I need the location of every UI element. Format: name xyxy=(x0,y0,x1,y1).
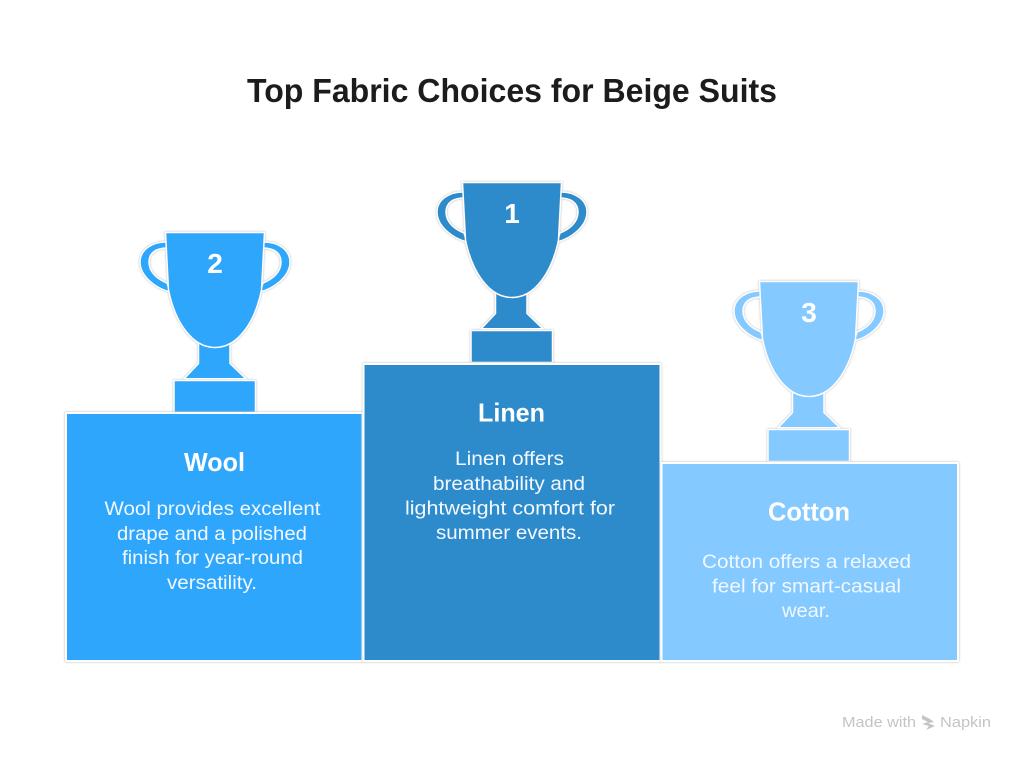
cotton description xyxy=(702,551,911,622)
linen description: breathability and xyxy=(433,473,585,495)
watermark: made with napkin xyxy=(842,715,991,731)
watermark: made with napkin: Made with xyxy=(842,715,916,731)
panel: linen, first place xyxy=(364,182,660,661)
icon: napkin logo xyxy=(922,715,935,730)
cotton rank number: 3 xyxy=(801,297,817,328)
cotton description: Cotton offers a relaxed xyxy=(702,551,911,573)
cotton podium block xyxy=(662,463,958,661)
watermark: made with napkin: Napkin xyxy=(940,715,991,731)
panel: cotton, third place xyxy=(662,282,958,661)
linen rank number: 1 xyxy=(504,198,520,229)
wool description xyxy=(104,498,321,594)
wool description: drape and a polished xyxy=(117,523,307,545)
title: Top Fabric Choices for Beige Suits xyxy=(247,72,777,109)
linen heading: Linen xyxy=(478,398,545,428)
wool description: versatility. xyxy=(167,572,257,594)
linen description: Linen offers xyxy=(455,448,564,470)
icon: linen trophy xyxy=(437,182,587,362)
cotton description: feel for smart-casual xyxy=(712,576,901,598)
linen description: summer events. xyxy=(436,522,582,544)
wool description: Wool provides excellent xyxy=(104,498,321,520)
wool rank number: 2 xyxy=(207,248,223,279)
panel: wool, second place xyxy=(66,232,362,661)
wool podium block xyxy=(66,413,362,661)
wool heading: Wool xyxy=(184,447,245,477)
icon: wool trophy xyxy=(140,232,290,412)
icon: cotton trophy xyxy=(734,282,884,462)
cotton heading: Cotton xyxy=(768,496,850,526)
cotton description: wear. xyxy=(781,600,830,622)
linen description: lightweight comfort for xyxy=(405,498,616,520)
wool description: finish for year-round xyxy=(122,547,303,569)
linen description xyxy=(405,448,616,544)
linen podium block xyxy=(364,364,660,661)
